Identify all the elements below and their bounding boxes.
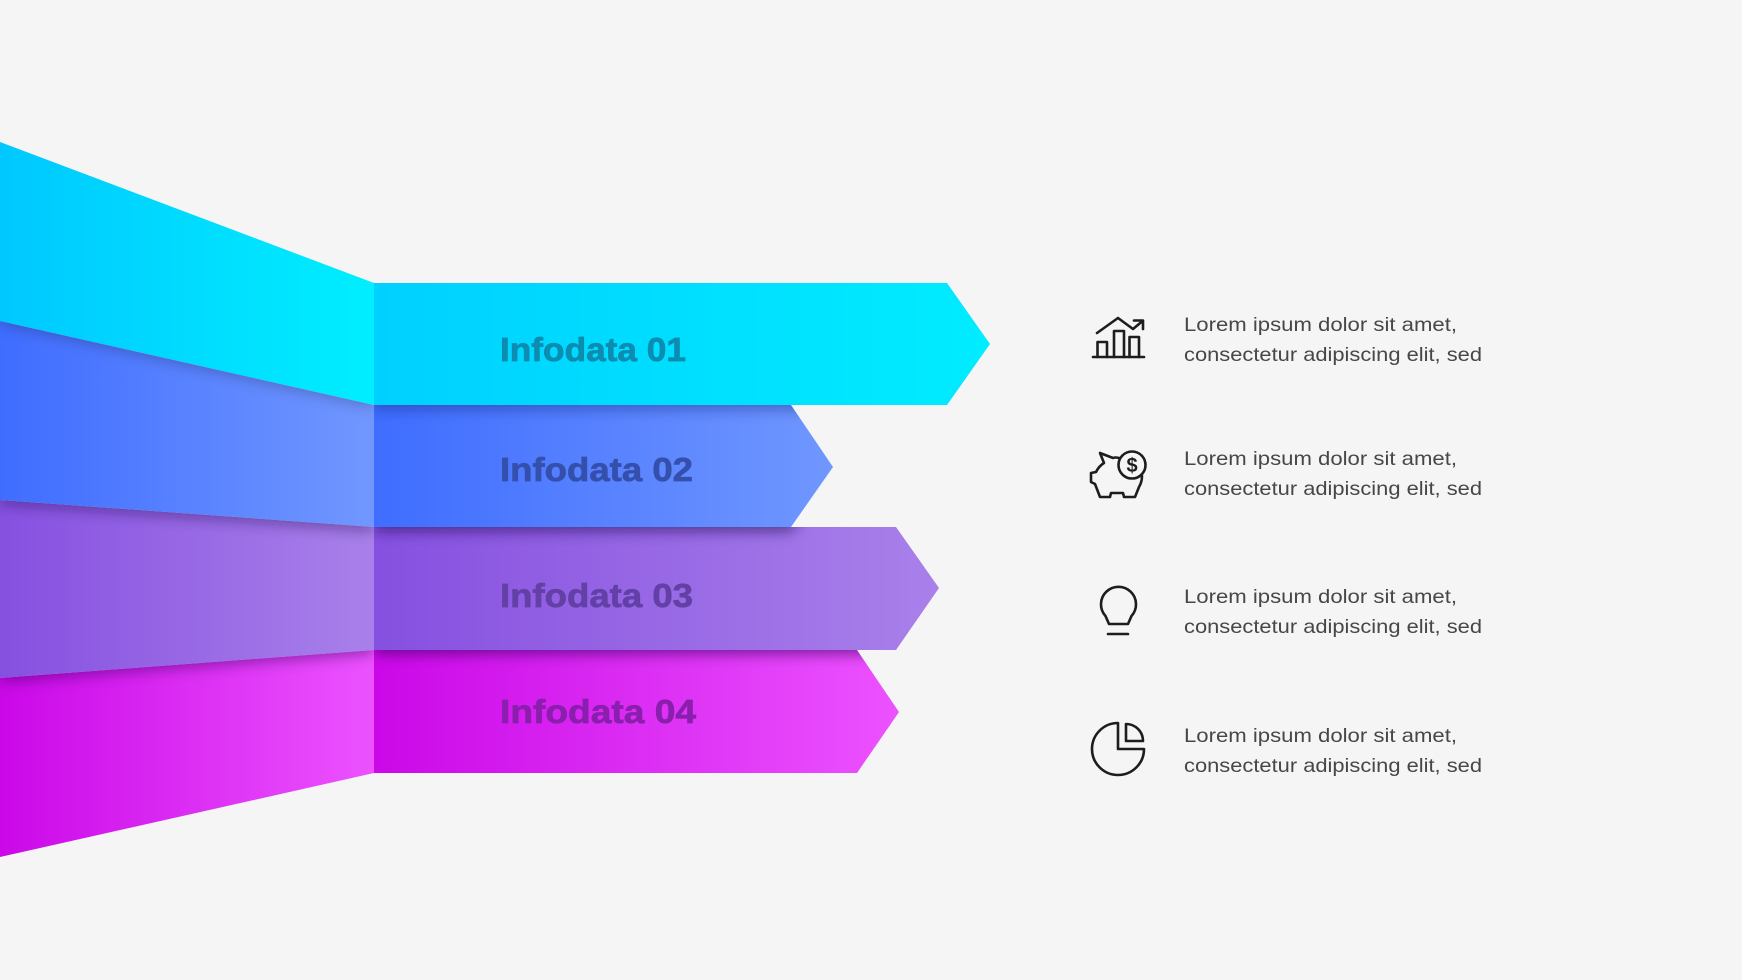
icon: piggy bank with dollar coin [1091, 452, 1146, 497]
label: Infodata 04: Infodata 04 [500, 693, 697, 730]
panel: perspective band 3 purple [0, 500, 374, 678]
arrow 1 cyan [374, 283, 990, 405]
text block 3: consectetur adipiscing elit, sed [1184, 616, 1482, 638]
icon: piggy bank with dollar coin: $ [1126, 455, 1138, 477]
text block 1: consectetur adipiscing elit, sed [1184, 344, 1482, 366]
text block 2 [1184, 448, 1482, 500]
icon: pie chart [1092, 723, 1144, 775]
label: Infodata 01: Infodata 01 [500, 331, 686, 368]
text block 4: consectetur adipiscing elit, sed [1184, 755, 1482, 777]
text block 3: Lorem ipsum dolor sit amet, [1184, 586, 1457, 608]
text block 4: Lorem ipsum dolor sit amet, [1184, 725, 1457, 747]
text block 2: Lorem ipsum dolor sit amet, [1184, 448, 1457, 470]
panel: perspective band 1 cyan [0, 142, 374, 405]
arrow 4 magenta [374, 650, 899, 773]
icon: light bulb [1101, 587, 1136, 634]
arrow 3 purple [374, 527, 939, 650]
label: Infodata 03: Infodata 03 [500, 577, 693, 614]
arrow 2 blue [374, 405, 833, 527]
text block 2: consectetur adipiscing elit, sed [1184, 478, 1482, 500]
label: Infodata 02: Infodata 02 [500, 451, 693, 488]
text block 1 [1184, 314, 1482, 366]
text block 4 [1184, 725, 1482, 777]
text block 1: Lorem ipsum dolor sit amet, [1184, 314, 1457, 336]
text block 3 [1184, 586, 1482, 638]
icon: bar chart with rising arrow [1093, 318, 1144, 357]
panel: perspective band 2 blue [0, 321, 374, 527]
panel: perspective band 4 magenta [0, 650, 374, 857]
